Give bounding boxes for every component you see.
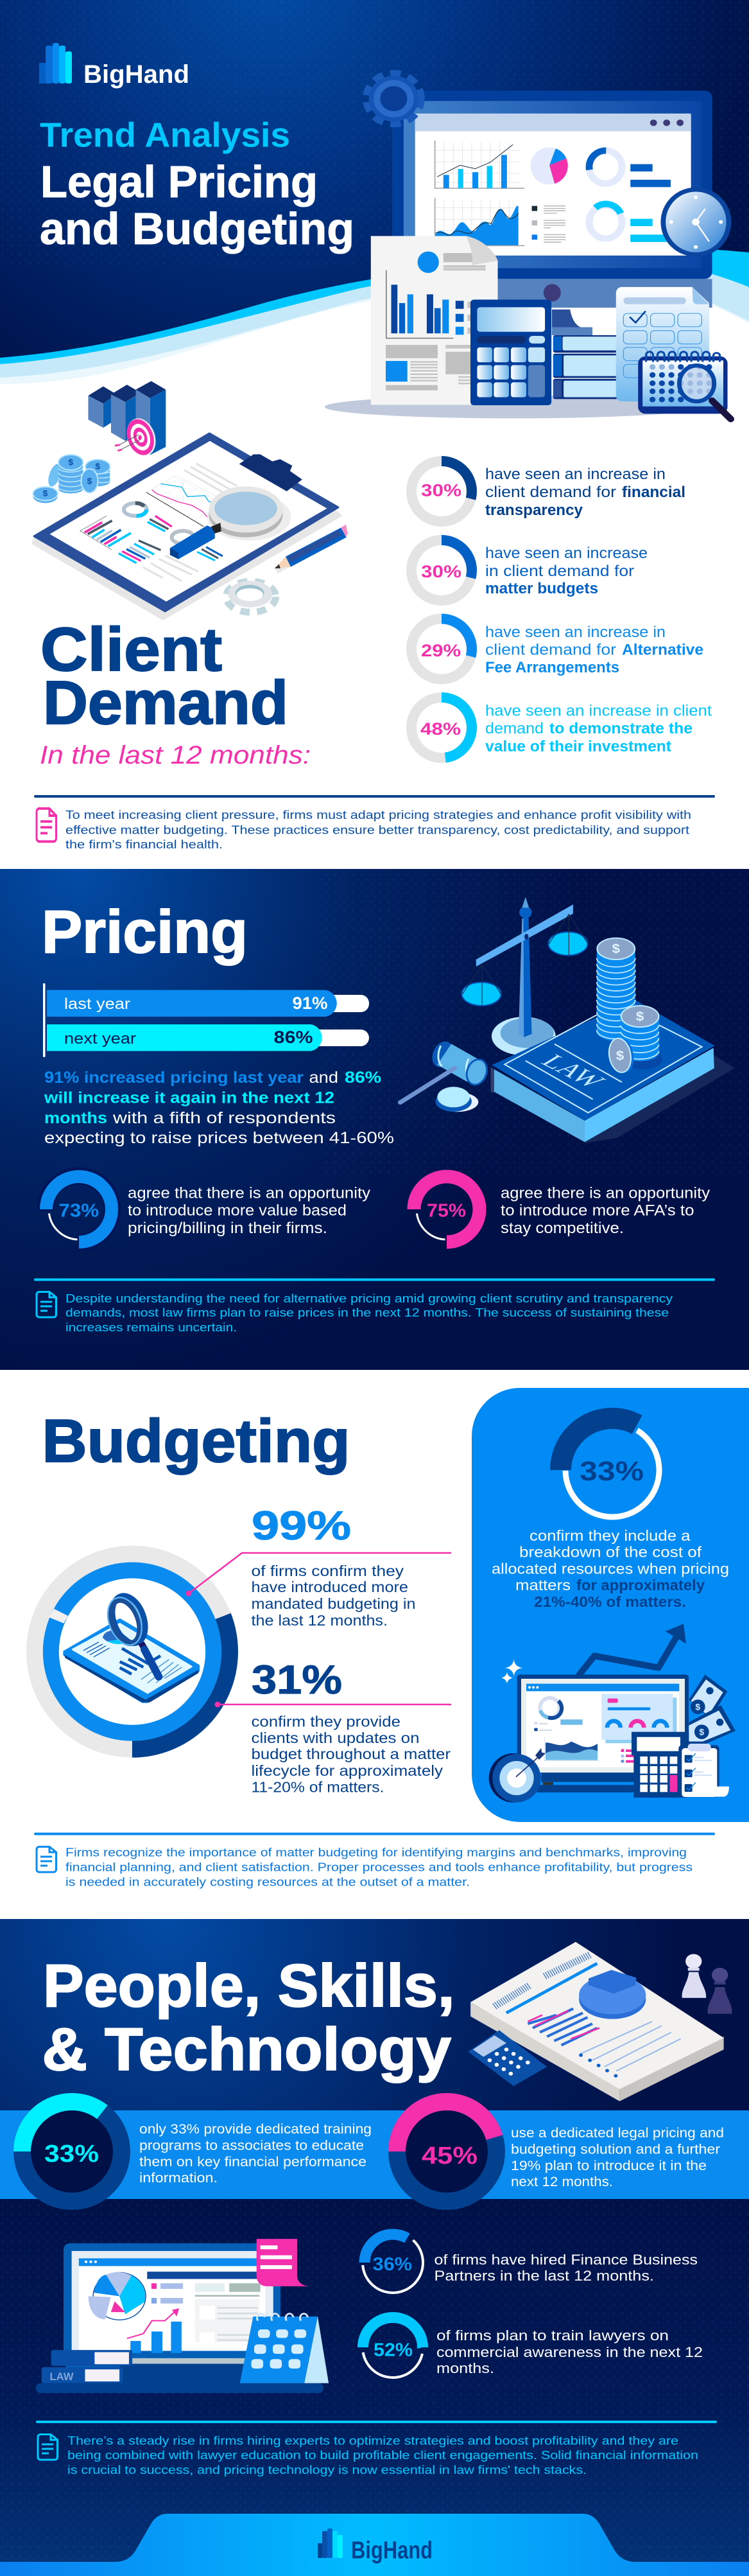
stat: 33 percent training: them on key financial performance xyxy=(139,2155,366,2169)
callout note: pricing: demands, most law firms plan to raise prices in the next 12 months. The success of sustaining these xyxy=(65,1306,669,1319)
gear icon xyxy=(366,73,421,124)
stat: 30 percent matter budgets: have seen an increase xyxy=(485,545,648,562)
law book: LAW xyxy=(535,1051,612,1092)
callout note: client demand: To meet increasing client pressure, firms must adapt pricing strategies and enhance profit visibility with xyxy=(65,809,691,821)
pie chart xyxy=(89,2272,146,2320)
text block: pricing summary: and xyxy=(309,1069,338,1087)
stat: 48 percent demonstrate value: value of their investment xyxy=(485,738,671,755)
illustration: laptop with books, note and calendar xyxy=(36,2239,329,2393)
stat: 45 percent pricing solution: 45% xyxy=(422,2142,478,2169)
illustration: dashboard laptop, calculator, money and target xyxy=(489,1624,736,1803)
heading: people skills technology: & Technology xyxy=(42,2015,451,2083)
stat: 31 percent: budget throughout a matter xyxy=(252,1746,451,1762)
stat: 31 percent: 31% xyxy=(252,1658,342,1703)
bar chart: price increases: last year xyxy=(64,995,130,1013)
text block: pricing summary: expecting to raise prices between 41-60% xyxy=(44,1129,394,1147)
text block: breakdown: for approximately xyxy=(576,1577,705,1593)
chart: bars and line xyxy=(435,141,524,188)
stat: 30 percent matter budgets: 30% xyxy=(421,562,461,581)
stat: 99 percent: of firms confirm they xyxy=(252,1563,404,1579)
chart: donut two xyxy=(589,204,670,242)
icon: note document cyan xyxy=(37,1292,56,1317)
stat: 29 percent alternative fee arrangements: client demand for xyxy=(485,641,616,659)
growth arrow xyxy=(578,1624,686,1676)
clipboard checklist xyxy=(678,1744,729,1797)
logo: BigHand xyxy=(39,43,189,89)
chart: pie xyxy=(531,147,568,184)
callout note: people skills technology: being combined with lawyer education to build profitable client engagements. Solid financial information xyxy=(67,2449,698,2462)
heading: client demand xyxy=(40,615,288,737)
pink note xyxy=(257,2239,309,2286)
stat: 36 percent: 36% xyxy=(372,2254,412,2275)
bar chart: price increases: next year xyxy=(64,1030,136,1047)
icon: note document pink xyxy=(37,809,56,841)
callout note: people skills technology: is crucial to success, and pricing technology is now essential in law firms' tech stacks. xyxy=(67,2464,587,2476)
chart: 33 percent ring: 33% xyxy=(580,1456,644,1487)
heading: people skills technology: People, Skills, xyxy=(43,1952,454,2019)
stat: 45 percent pricing solution: next 12 months. xyxy=(511,2175,613,2189)
band: training and solution stats xyxy=(0,2110,749,2199)
stat: 45 percent pricing solution: budgeting solution and a further xyxy=(511,2142,720,2157)
stat: 33 percent training: only 33% provide dedicated training xyxy=(139,2122,372,2137)
chart: area xyxy=(435,198,524,246)
stat: 73 percent: to introduce more value based xyxy=(128,1202,347,1219)
stat: 30 percent financial transparency: client demand for xyxy=(485,484,616,501)
text block: pricing summary: 91% increased pricing last year xyxy=(44,1069,304,1087)
stat: 30 percent financial transparency: transparency xyxy=(485,502,583,519)
stat: 30 percent matter budgets: in client demand for xyxy=(485,563,634,580)
illustration: dashboard monitor with documents, calculator and calendar xyxy=(325,73,731,419)
title: Legal Pricing xyxy=(40,157,318,207)
banknotes: $ xyxy=(695,1702,700,1712)
text block: breakdown: allocated resources when pricing xyxy=(492,1561,729,1577)
icon: small gear xyxy=(226,581,276,612)
icon: coins: $ xyxy=(95,462,101,471)
stat: 45 percent pricing solution xyxy=(397,2101,724,2202)
stat: 31 percent xyxy=(252,1658,451,1796)
illustration: law book, scales, gavel and coins xyxy=(400,897,734,1143)
panel: pricing xyxy=(0,869,749,1370)
stat: 73 percent: 73% xyxy=(59,1201,99,1222)
icon: coins: $ xyxy=(68,457,74,467)
text block: pricing summary xyxy=(44,1069,394,1147)
stat: 52 percent: commercial awareness in the next 12 xyxy=(436,2344,703,2360)
heading: people skills technology xyxy=(42,1952,454,2083)
illustration: clipboard with charts, magnifier, coins and target xyxy=(31,381,350,620)
stat: 75 percent: stay competitive. xyxy=(501,1220,624,1237)
stat: 99 percent: mandated budgeting in xyxy=(252,1595,416,1612)
stat: 31 percent: clients with updates on xyxy=(252,1730,420,1746)
logo: BigHand footer: BigHand xyxy=(351,2537,433,2564)
icon: pencil xyxy=(275,525,350,574)
text block: pricing summary: will increase it again in the next 12 xyxy=(44,1089,334,1107)
calculator xyxy=(632,1732,689,1798)
coin stacks: $ xyxy=(616,1047,624,1063)
chart: 33 percent ring xyxy=(547,1405,677,1535)
chart: nested budget rings with tablet and magnifier xyxy=(6,1525,259,1778)
stat: 33 percent training: information. xyxy=(139,2171,218,2186)
text block: breakdown xyxy=(492,1527,729,1610)
stat: 36 percent: Partners in the last 12 months. xyxy=(434,2268,654,2284)
stat: 48 percent demonstrate value: 48% xyxy=(420,719,461,739)
icon: note document blue xyxy=(37,1847,56,1872)
stat: 31 percent: lifecycle for approximately xyxy=(252,1762,443,1779)
coin stacks: $ xyxy=(612,941,620,956)
stat: 33 percent training: 33% xyxy=(44,2141,99,2168)
stat: 29 percent alternative fee arrangements: Fee Arrangements xyxy=(485,659,619,676)
calculator xyxy=(468,2030,547,2086)
callout note: pricing: increases remains uncertain. xyxy=(65,1321,237,1334)
stat: 29 percent alternative fee arrangements: 29% xyxy=(421,641,461,660)
stat: 52 percent: of firms plan to train lawyers on xyxy=(436,2327,669,2344)
calendar xyxy=(240,2313,329,2383)
icon: coins xyxy=(33,455,110,503)
subheading: In the last 12 months: xyxy=(40,741,311,769)
stat: 52 percent: months. xyxy=(436,2360,494,2376)
stat: 73 percent: pricing/billing in their firms. xyxy=(128,1220,327,1237)
text block: breakdown: breakdown of the cost of xyxy=(519,1544,702,1561)
text block: pricing summary: months xyxy=(44,1109,107,1127)
callout note: client demand: the firm's financial health. xyxy=(65,838,223,851)
stat: 52 percent: 52% xyxy=(374,2340,413,2361)
stat: 48 percent demonstrate value xyxy=(411,697,712,758)
stat: 73 percent xyxy=(44,1175,370,1244)
panel: 33 percent breakdown card xyxy=(472,1388,749,1822)
books xyxy=(553,335,617,399)
icon: calculator xyxy=(470,300,551,405)
legend xyxy=(532,206,565,242)
stat: 33 percent training xyxy=(22,2101,372,2202)
text block: breakdown: 21%-40% of matters. xyxy=(534,1593,686,1610)
icon: note document cyan two xyxy=(38,2434,58,2460)
stat: 30 percent financial transparency xyxy=(411,461,685,521)
gavel xyxy=(400,1038,490,1112)
heading: pricing: Pricing xyxy=(42,898,248,965)
stat: 75 percent xyxy=(414,1177,710,1242)
icon: coins: $ xyxy=(87,477,92,486)
icon: coins: $ xyxy=(43,489,48,498)
checklist sheet xyxy=(616,287,709,401)
paper content xyxy=(80,464,237,581)
heading: client demand: Client xyxy=(40,615,222,684)
bar chart: price increases: 86% xyxy=(273,1028,313,1047)
panel: header xyxy=(0,0,749,450)
law book xyxy=(491,1000,714,1142)
stat: 33 percent training: programs to associates to educate xyxy=(139,2139,364,2153)
clip xyxy=(239,454,302,491)
stat: 31 percent: 11-20% of matters. xyxy=(252,1779,384,1796)
bar chart: price increases: 91% xyxy=(293,994,327,1013)
panel: client demand xyxy=(31,381,715,851)
stat: 48 percent demonstrate value: have seen an increase in client xyxy=(485,703,712,719)
title xyxy=(40,116,354,254)
stat: 99 percent xyxy=(252,1503,416,1629)
stat: 75 percent: to introduce more AFA’s to xyxy=(501,1202,694,1219)
panel: budgeting xyxy=(6,1388,749,1888)
title: Trend Analysis xyxy=(40,116,290,154)
stat: 99 percent: have introduced more xyxy=(252,1579,408,1595)
scales of justice xyxy=(461,897,588,1055)
callout note: client demand xyxy=(65,809,691,851)
icon: target xyxy=(115,415,160,460)
callout note: pricing: Despite understanding the need for alternative pricing amid growing client scrutiny and transparency xyxy=(65,1292,673,1305)
coin stacks xyxy=(597,938,662,1074)
footer tab xyxy=(0,2514,749,2576)
chart: donut one xyxy=(589,150,671,187)
bar chart: price increases xyxy=(43,983,369,1057)
banknotes: $ xyxy=(699,1727,704,1737)
stat: 30 percent financial transparency: have seen an increase in xyxy=(485,466,666,483)
callout note: budgeting: financial planning, and client satisfaction. Proper processes and tools enhance profitability, but progress xyxy=(65,1861,693,1874)
stat: 30 percent financial transparency: financial xyxy=(622,484,685,501)
stat: 48 percent demonstrate value: demand xyxy=(485,720,544,737)
report document xyxy=(371,236,498,405)
text block: breakdown: confirm they include a xyxy=(529,1527,691,1544)
stat: 29 percent alternative fee arrangements xyxy=(411,619,703,679)
stat: 36 percent xyxy=(350,2220,698,2305)
text block: pricing summary: with a fifth of respondents xyxy=(112,1109,336,1127)
title: and Budgeting xyxy=(40,204,354,254)
callout line: 31 percent xyxy=(214,1702,451,1707)
icon: calendar with magnifier xyxy=(638,352,731,419)
callout note: budgeting: is needed in accurately costing resources at the outset of a matter. xyxy=(65,1875,470,1888)
screen widgets xyxy=(534,1694,676,1763)
icon: clock xyxy=(660,188,731,257)
callout note: pricing xyxy=(65,1292,673,1334)
magnifier xyxy=(101,1591,159,1677)
stat: 29 percent alternative fee arrangements: Alternative xyxy=(622,641,703,659)
coin stacks: $ xyxy=(636,1008,644,1024)
callout line: 99 percent xyxy=(186,1553,451,1597)
illustration: isometric report, calculator and chess pieces xyxy=(468,1942,732,2101)
stat: 52 percent xyxy=(357,2311,703,2383)
heading: client demand: Demand xyxy=(43,669,288,737)
stat: 30 percent matter budgets: matter budgets xyxy=(485,580,598,597)
logo: BigHand: BigHand xyxy=(83,60,189,89)
callout note: budgeting: Firms recognize the importance of matter budgeting for identifying margins and benchmarks, improving xyxy=(65,1846,687,1859)
callout note: client demand: effective matter budgeting. These practices ensure better transparency, cost predictability, and support xyxy=(65,823,689,836)
stat: 45 percent pricing solution: 19% plan to introduce it in the xyxy=(511,2159,707,2173)
stat: 99 percent: 99% xyxy=(252,1503,351,1548)
heading: budgeting: Budgeting xyxy=(42,1407,350,1475)
stat: 36 percent: of firms have hired Finance Business xyxy=(434,2252,698,2268)
growth bars xyxy=(127,2308,182,2353)
callout note: people skills technology: There’s a steady rise in firms hiring experts to optimize strategies and boost profitability and they are xyxy=(67,2435,678,2448)
text block: breakdown: matters xyxy=(515,1577,571,1593)
panel: people skills technology xyxy=(0,1919,749,2576)
stat: 48 percent demonstrate value: to demonstrate the xyxy=(549,720,693,737)
banknotes xyxy=(689,1674,736,1745)
stat: 45 percent pricing solution: use a dedicated legal pricing and xyxy=(511,2126,724,2141)
stat: 75 percent: 75% xyxy=(427,1201,466,1222)
stat: 75 percent: agree there is an opportunity xyxy=(501,1184,710,1202)
text block: pricing summary: 86% xyxy=(345,1069,381,1087)
books xyxy=(42,2350,132,2383)
stat: 73 percent: agree that there is an opportunity xyxy=(128,1184,370,1202)
logo: BigHand footer xyxy=(318,2528,433,2564)
bar columns xyxy=(88,381,166,455)
stat: 31 percent: confirm they provide xyxy=(252,1713,400,1730)
stat: 29 percent alternative fee arrangements: have seen an increase in xyxy=(485,624,666,641)
books: LAW xyxy=(49,2370,74,2383)
stat: 30 percent financial transparency: 30% xyxy=(421,481,461,500)
stat: 30 percent matter budgets xyxy=(411,540,648,600)
icon: magnifier xyxy=(170,486,291,559)
callout note: people skills technology xyxy=(67,2435,698,2476)
chess pieces xyxy=(682,1954,732,2014)
callout note: budgeting xyxy=(65,1846,693,1888)
stat: 99 percent: the last 12 months. xyxy=(252,1612,388,1629)
target dial xyxy=(489,1748,546,1803)
